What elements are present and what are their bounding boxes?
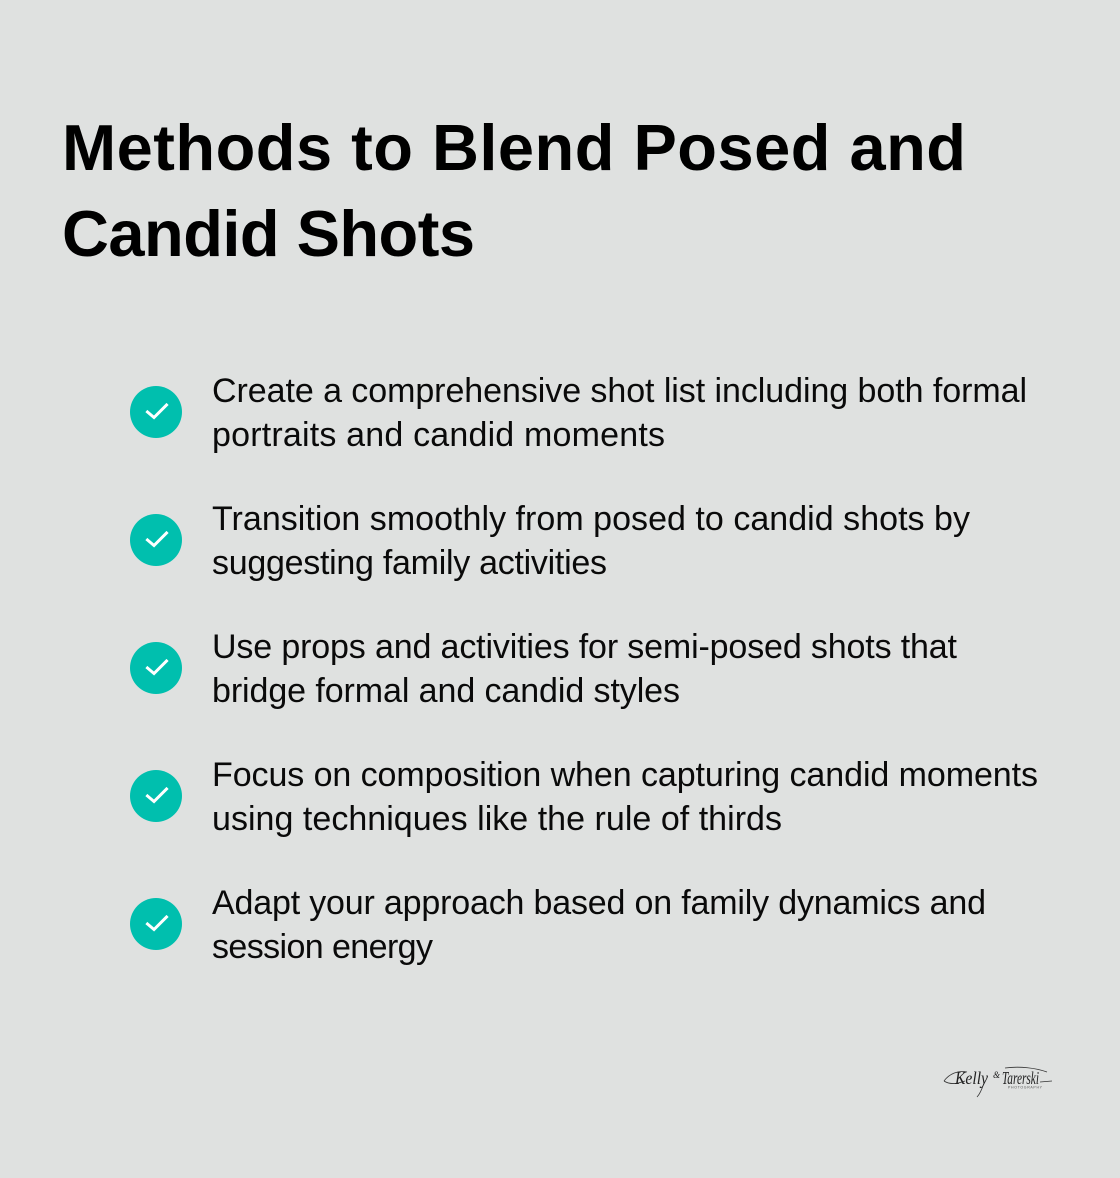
text 2: Transition smoothly from posed to candid shots by [212,500,970,538]
text 1 [212,372,1027,454]
icon: check 2 [130,514,182,566]
icon: check 3 [130,642,182,694]
icon: check 4 [130,770,182,822]
text 3: Use props and activities for semi-posed shots that [212,628,958,666]
logo: signature: PHOTOGRAPHY [1008,1086,1043,1090]
text 1: Create a comprehensive shot list including both formal [212,372,1027,410]
title [62,111,966,270]
logo: signature: Tarerski [1002,1068,1039,1088]
text 5: Adapt your approach based on family dynamics and [212,884,986,922]
text 2: suggesting family activities [212,544,607,582]
text 3 [212,628,958,710]
item 2 [130,500,970,582]
title: Candid Shots [62,197,475,270]
text 5: session energy [212,928,433,966]
text 1: portraits and candid moments [212,416,665,454]
text 4: Focus on composition when capturing candid moments [212,756,1038,794]
text 4 [212,756,1038,838]
icon: check 1 [130,386,182,438]
item 5 [130,884,986,966]
logo: signature: Kelly [954,1068,988,1088]
checklist [130,372,1038,966]
logo: signature [944,1067,1052,1097]
text 5 [212,884,986,966]
item 1 [130,372,1027,454]
text 3: bridge formal and candid styles [212,672,680,710]
title: Methods to Blend Posed and [62,111,966,184]
logo: signature: & [993,1070,1000,1080]
text 4: using techniques like the rule of thirds [212,800,782,838]
item 3 [130,628,958,710]
text 2 [212,500,970,582]
icon: check 5 [130,898,182,950]
item 4 [130,756,1038,838]
